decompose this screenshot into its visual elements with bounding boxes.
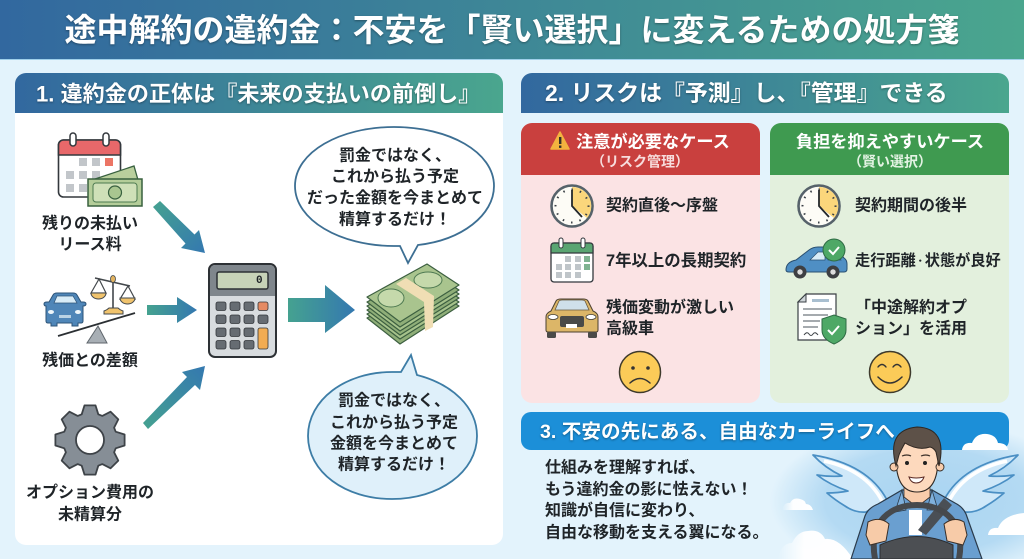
text: latter half: 契約期間の後半 <box>855 196 967 214</box>
label: option cost: 未精算分 <box>58 504 122 524</box>
callout: top speech bubble: だった金額を今まとめて <box>307 188 483 207</box>
icon: warning triangle <box>551 132 569 149</box>
illustration: driver with wings <box>813 427 1018 559</box>
icon: car and scales <box>44 276 135 343</box>
callout: bottom speech bubble: 罰金ではなく、 <box>338 390 450 410</box>
hand: left <box>866 519 889 545</box>
heading: easier <box>770 123 1009 175</box>
text: luxury cars: 高級車 <box>606 318 654 338</box>
callout: bottom speech bubble <box>308 355 477 499</box>
title banner <box>0 0 1024 60</box>
callout: top speech bubble <box>295 127 494 263</box>
text: closing message: 仕組みを理解すれば、 <box>545 458 705 476</box>
callout: top speech bubble: 精算するだけ！ <box>339 210 451 228</box>
icon: smiling face <box>870 352 910 392</box>
heading: section 3 <box>521 412 1009 450</box>
callout: top speech bubble: 罰金ではなく、 <box>339 146 451 164</box>
heading: caution <box>521 123 760 175</box>
label: remaining lease: 残りの未払い <box>42 214 138 232</box>
icon: calendar and cash <box>58 133 142 206</box>
icon: clock <box>552 186 592 226</box>
hair <box>894 427 941 466</box>
heading: section 2 <box>521 73 1009 113</box>
sky background <box>770 430 1024 559</box>
text: luxury cars: 残価変動が激しい <box>606 298 734 316</box>
heading: caution: 注意が必要なケース <box>576 132 730 152</box>
text: early termination option: 「中途解約オプ <box>855 298 967 316</box>
icon: clock <box>798 186 840 226</box>
icon: sad face <box>620 352 660 392</box>
arrow: residual to calculator <box>147 297 197 323</box>
hand: right <box>944 519 967 545</box>
heading: section 1: 1. 違約金の正体は『未来の支払いの前倒し』 <box>36 82 480 106</box>
text: long-term contract: 7年以上の長期契約 <box>606 251 746 270</box>
callout: bottom speech bubble: これから払う予定 <box>330 414 458 432</box>
text: just after contract: 契約直後〜序盤 <box>606 196 718 214</box>
icon: document with shield <box>798 294 846 344</box>
label: option cost: オプション費用の <box>26 484 154 502</box>
heading: easier: （賢い選択） <box>848 154 932 170</box>
panel: easier cases <box>770 123 1009 403</box>
icon: gear <box>55 405 125 475</box>
panel: caution cases <box>521 123 760 403</box>
icon: clouds <box>778 434 1024 559</box>
heading: easier: 負担を抑えやすいケース <box>796 132 984 152</box>
callout: top speech bubble: これから払う予定 <box>331 168 459 186</box>
label: remaining lease <box>42 214 138 254</box>
heading: section 1 <box>15 73 503 113</box>
icon: blue car with check <box>786 239 847 278</box>
callout: bottom speech bubble: 金額を今まとめて <box>330 434 458 452</box>
head <box>896 440 938 492</box>
heading: section 2: 2. リスクは『予測』し、『管理』できる <box>545 80 948 106</box>
arrow: option to calculator <box>143 366 205 429</box>
callout: bottom speech bubble: 精算するだけ！ <box>338 454 450 474</box>
text: mileage good: 走行距離・状態が良好 <box>855 252 1001 270</box>
title banner: 途中解約の違約金：不安を「賢い選択」に変えるための処方箋 <box>64 12 960 48</box>
heading: section 3: 3. 不安の先にある、自由なカーライフへ <box>540 421 895 443</box>
steering wheel <box>874 505 960 559</box>
torso <box>851 490 982 559</box>
text: luxury cars <box>606 298 734 338</box>
icon: calculator: 0 <box>256 275 263 287</box>
icon: calculator <box>209 264 276 357</box>
label: option cost <box>26 484 154 524</box>
label: remaining lease: リース料 <box>58 236 122 254</box>
panel: 1 penalty explanation <box>15 73 503 545</box>
text: closing message: 自由な移動を支える翼になる。 <box>545 522 769 542</box>
text: early termination option: ション」を活用 <box>855 320 967 338</box>
neck <box>904 480 930 507</box>
text: closing message: 知識が自信に変わり、 <box>545 500 704 520</box>
arrow: lease to calculator <box>153 201 205 253</box>
text: closing message: もう違約金の影に怯えない！ <box>545 480 753 498</box>
label: residual difference: 残価との差額 <box>42 350 138 370</box>
icon: green calendar <box>551 238 593 282</box>
arrow: calculator to cash <box>288 285 355 333</box>
heading: caution: （リスク管理） <box>591 154 689 170</box>
icon: luxury car <box>546 299 598 338</box>
wing: right <box>944 455 1018 512</box>
text: closing message <box>545 458 769 542</box>
icon: cash stack <box>367 264 459 344</box>
text: early termination option <box>855 298 967 338</box>
wing: left <box>813 455 887 512</box>
